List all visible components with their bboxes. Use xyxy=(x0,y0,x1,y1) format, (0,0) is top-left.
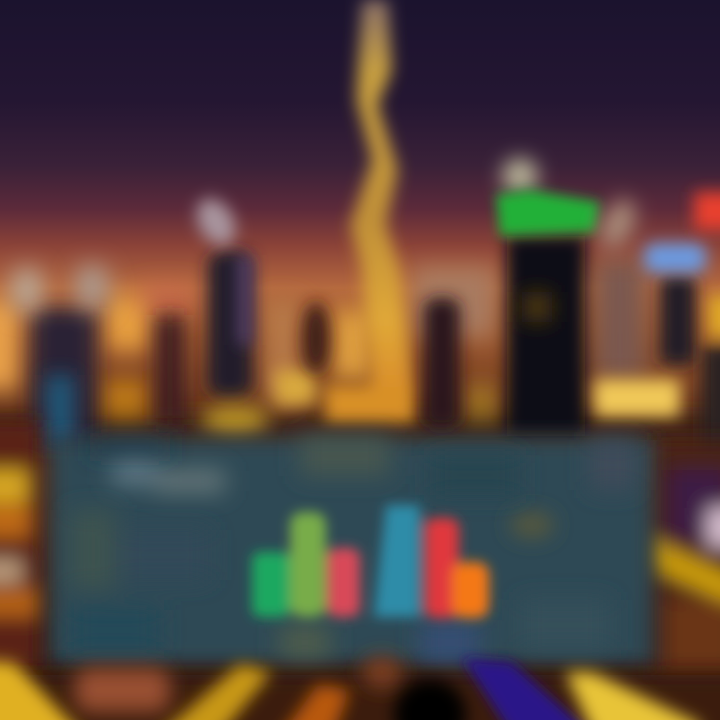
indigo streak xyxy=(462,658,604,720)
left edge city lights xyxy=(0,420,40,670)
small left tower xyxy=(156,315,184,425)
black gap xyxy=(394,679,466,720)
left yellow streak xyxy=(0,660,92,720)
gold streak xyxy=(148,664,272,720)
far right tan blob and blue band tower xyxy=(593,194,706,365)
bar: green xyxy=(252,552,290,617)
right edge city lights xyxy=(648,440,720,680)
panel background xyxy=(50,438,653,666)
green-topped black tower xyxy=(496,158,600,436)
bar: lime xyxy=(290,512,326,617)
dark right mid tower xyxy=(424,298,460,428)
bar: blue xyxy=(374,505,420,617)
city glow behind skyline xyxy=(0,260,720,445)
left tower with blue base xyxy=(12,265,108,448)
central spire tower xyxy=(275,0,415,423)
dark road base xyxy=(0,675,720,720)
gold podium right xyxy=(594,379,680,417)
rust patch xyxy=(362,656,402,688)
panel blurred heading xyxy=(112,455,225,492)
far right red and yellow edge xyxy=(694,192,720,470)
orange streak xyxy=(274,684,350,720)
bar chart xyxy=(252,505,489,618)
narrow mid tower xyxy=(303,302,329,374)
pale yellow streak xyxy=(565,672,702,720)
brown road segment xyxy=(75,668,170,712)
panel texture xyxy=(70,436,635,665)
gold base below curved tower xyxy=(201,404,269,436)
bottom road lights xyxy=(0,656,720,720)
chart panel xyxy=(50,436,653,666)
skyline towers xyxy=(12,0,720,470)
bar: orange xyxy=(452,562,489,618)
bar: red xyxy=(327,548,360,617)
panel blurred label xyxy=(510,512,554,538)
bar: crimson xyxy=(425,518,459,618)
tall curved tower xyxy=(189,192,252,398)
